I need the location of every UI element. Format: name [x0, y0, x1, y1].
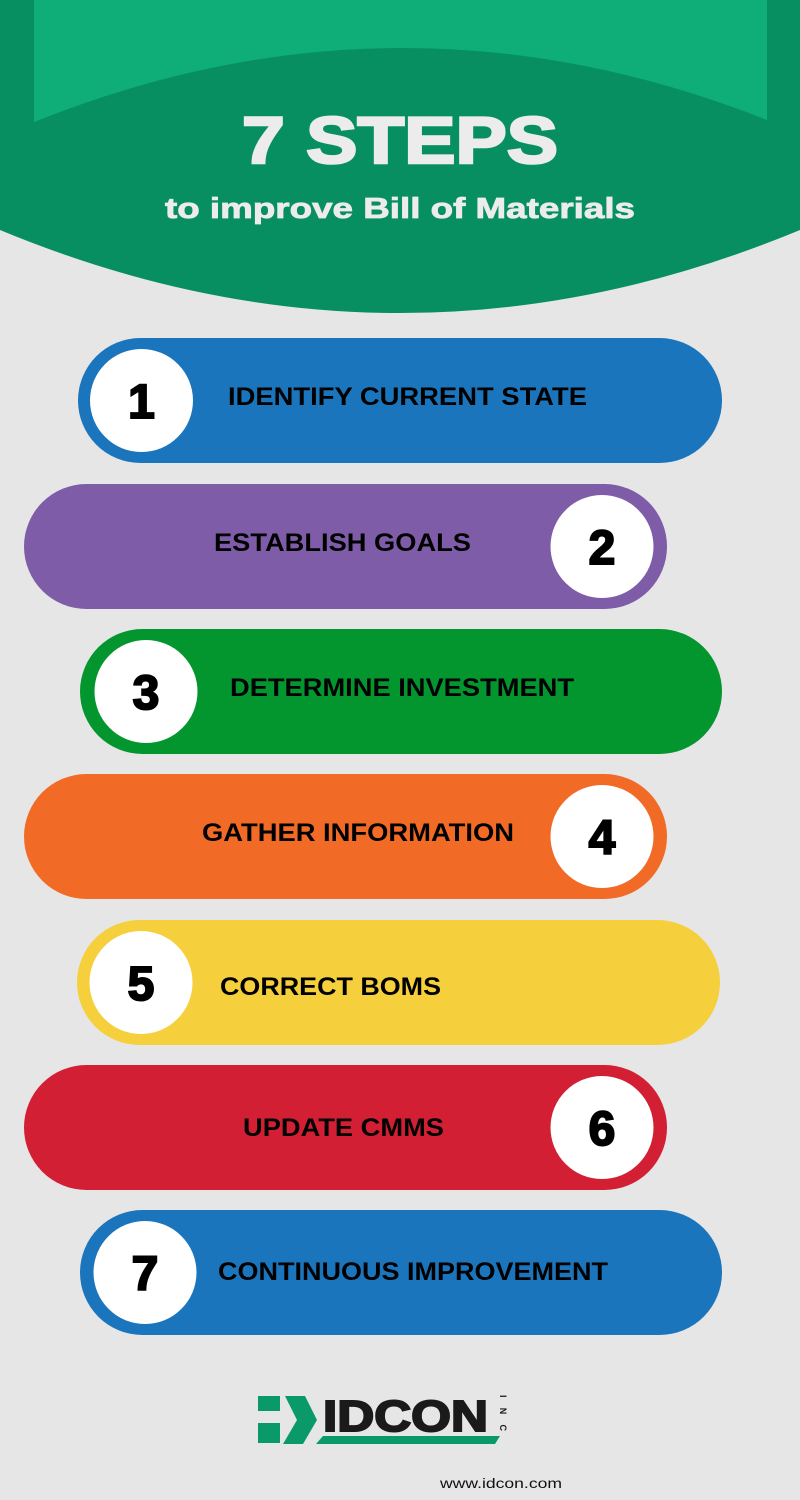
step 4: 4	[589, 812, 616, 865]
website: www.idcon.com	[439, 1475, 562, 1491]
step 1: IDENTIFY CURRENT STATE	[228, 383, 587, 411]
step 6	[24, 1065, 667, 1190]
step 6: UPDATE CMMS	[243, 1114, 444, 1142]
step 1	[78, 338, 722, 463]
step 4	[24, 774, 667, 899]
header banner	[0, 0, 800, 313]
step 3	[80, 629, 722, 754]
step 7: CONTINUOUS IMPROVEMENT	[218, 1258, 608, 1286]
step 3: DETERMINE INVESTMENT	[230, 674, 574, 702]
step 4: GATHER INFORMATION	[202, 819, 514, 847]
step 6: 6	[589, 1103, 615, 1156]
step 5	[77, 920, 720, 1045]
title: 7 STEPS	[242, 103, 558, 177]
step 7	[80, 1210, 722, 1335]
step 5: 5	[128, 958, 154, 1011]
step 2: 2	[589, 522, 615, 575]
step 7: 7	[132, 1248, 158, 1301]
step 1: 1	[128, 376, 155, 429]
logo: IDCON: INC	[498, 1395, 508, 1432]
step 2	[24, 484, 667, 609]
logo: IDCON: IDCON	[323, 1392, 488, 1441]
step 5: CORRECT BOMS	[220, 973, 441, 1001]
step 2: ESTABLISH GOALS	[214, 529, 471, 557]
subtitle: to improve Bill of Materials	[165, 193, 635, 225]
logo: IDCON	[258, 1392, 508, 1444]
step 3: 3	[133, 667, 159, 720]
